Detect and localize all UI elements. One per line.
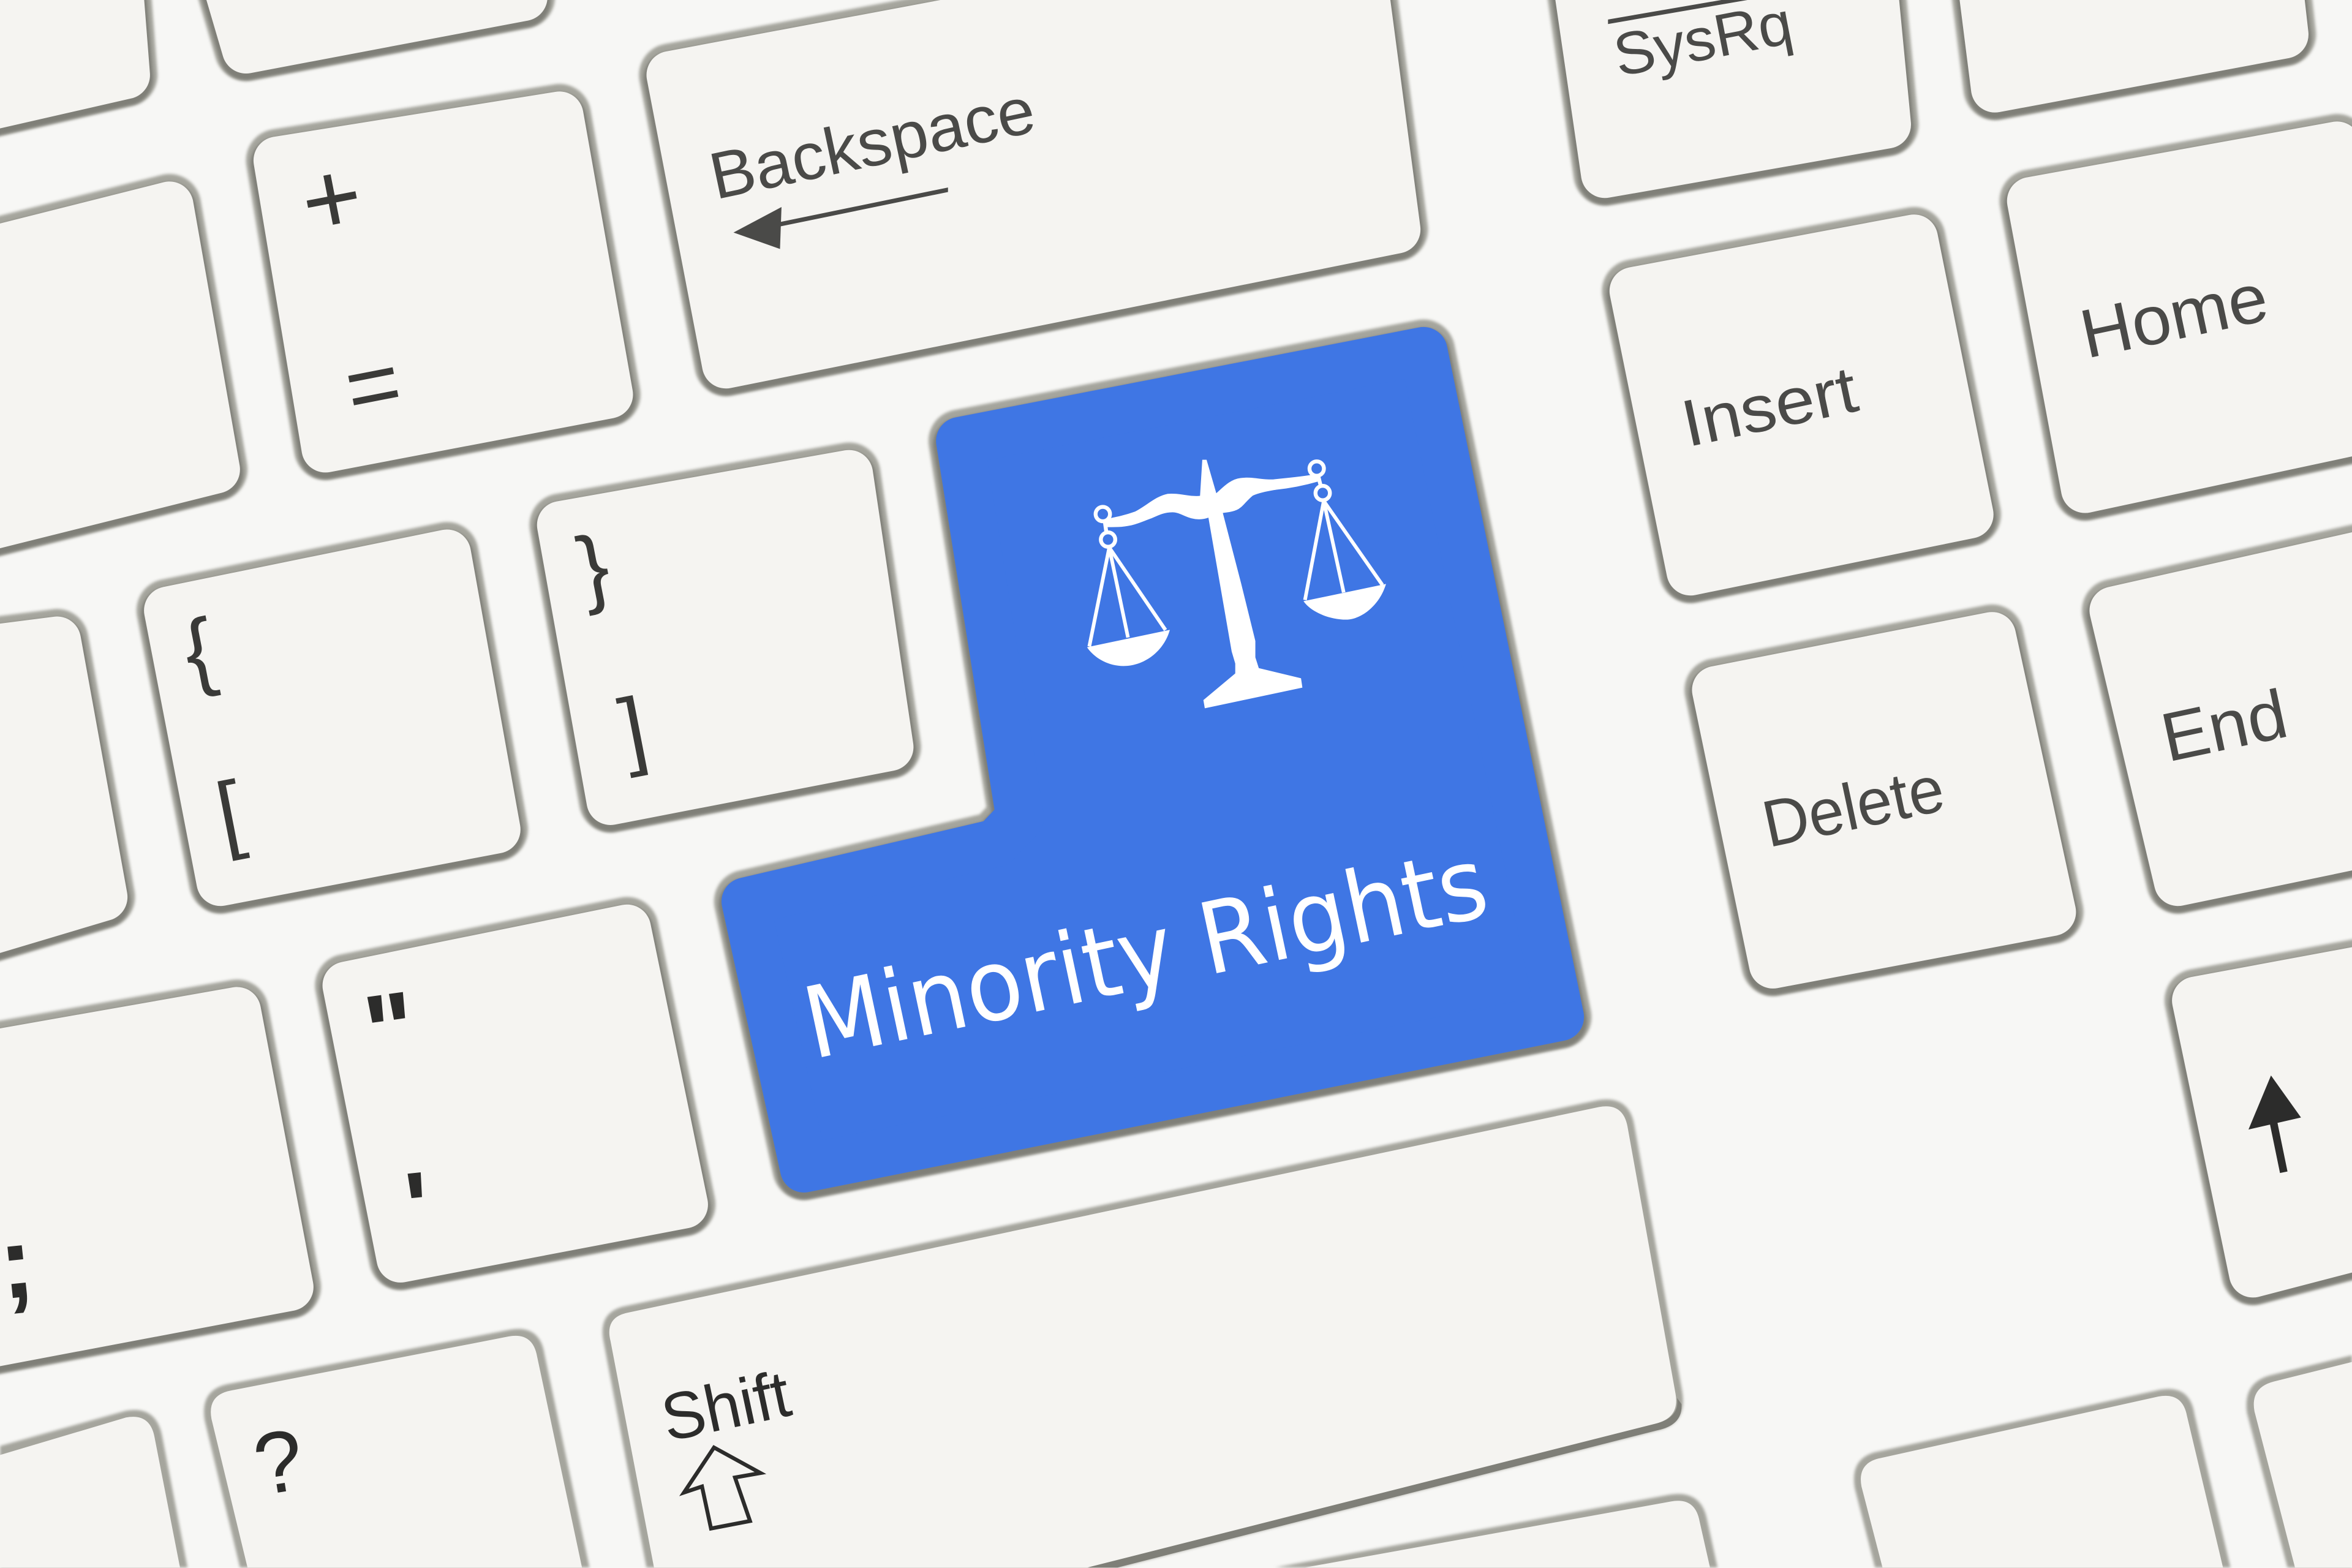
icon part: left pan xyxy=(1087,548,1170,666)
icon: backspace arrow xyxy=(734,187,948,249)
label: End: End xyxy=(2155,675,2294,777)
label: Minority Rights: Minority Rights xyxy=(794,825,1498,1082)
icon part: right pan xyxy=(1303,501,1386,620)
key: bottom-left partial xyxy=(0,1410,187,1567)
label: question mark: ? xyxy=(247,1411,311,1514)
icon: scales of justice xyxy=(1087,461,1386,707)
label: left brace: { xyxy=(176,600,223,701)
key: quotes xyxy=(347,929,684,1264)
key: left partial row two xyxy=(0,206,216,530)
key: Insert xyxy=(1634,238,1970,575)
label: equals: = xyxy=(337,330,410,442)
key: question mark xyxy=(204,1329,589,1567)
label: right bracket: ] xyxy=(612,679,654,779)
key: left partial row three xyxy=(0,641,104,935)
icon: shift arrow xyxy=(684,1447,761,1529)
icon part: left ring xyxy=(1096,507,1115,547)
key: top partial xyxy=(224,0,524,53)
key: top-right partial xyxy=(1978,0,2285,92)
label: left bracket: [ xyxy=(208,763,251,863)
key: plus and equals xyxy=(277,116,609,452)
icon part: beam and stand xyxy=(1107,461,1318,707)
key: top-left partial xyxy=(0,0,126,110)
label: Delete: Delete xyxy=(1756,751,1950,861)
label: right brace: } xyxy=(570,516,617,617)
panel: blue Minority Rights key xyxy=(745,351,1560,1172)
label: double quote: " xyxy=(357,969,423,1092)
label: Home: Home xyxy=(2073,258,2274,373)
key: Home xyxy=(2031,146,2352,492)
key: Delete xyxy=(1716,636,2052,968)
icon part: right ring xyxy=(1310,461,1330,500)
key: bottom-right partial xyxy=(2247,1355,2352,1567)
icon: up arrow xyxy=(2248,1076,2301,1173)
key: Backspace xyxy=(671,0,1396,368)
key: bottom partial xyxy=(1854,1389,2231,1567)
key: SysRq xyxy=(1574,0,1887,178)
key: End xyxy=(2114,554,2352,886)
label: apostrophe: ' xyxy=(400,1152,435,1264)
key: right brace and bracket xyxy=(561,474,889,805)
label: plus: + xyxy=(292,137,372,260)
label: Shift: Shift xyxy=(655,1356,797,1455)
key: Shift xyxy=(603,1099,1683,1567)
label: Backspace: Backspace xyxy=(703,72,1041,213)
key: up arrow xyxy=(2196,966,2352,1277)
key: left brace and bracket xyxy=(168,554,497,886)
label: Insert: Insert xyxy=(1675,352,1864,461)
key: bottom-centre partial xyxy=(1275,1494,1717,1567)
key: semicolon xyxy=(0,1011,290,1348)
